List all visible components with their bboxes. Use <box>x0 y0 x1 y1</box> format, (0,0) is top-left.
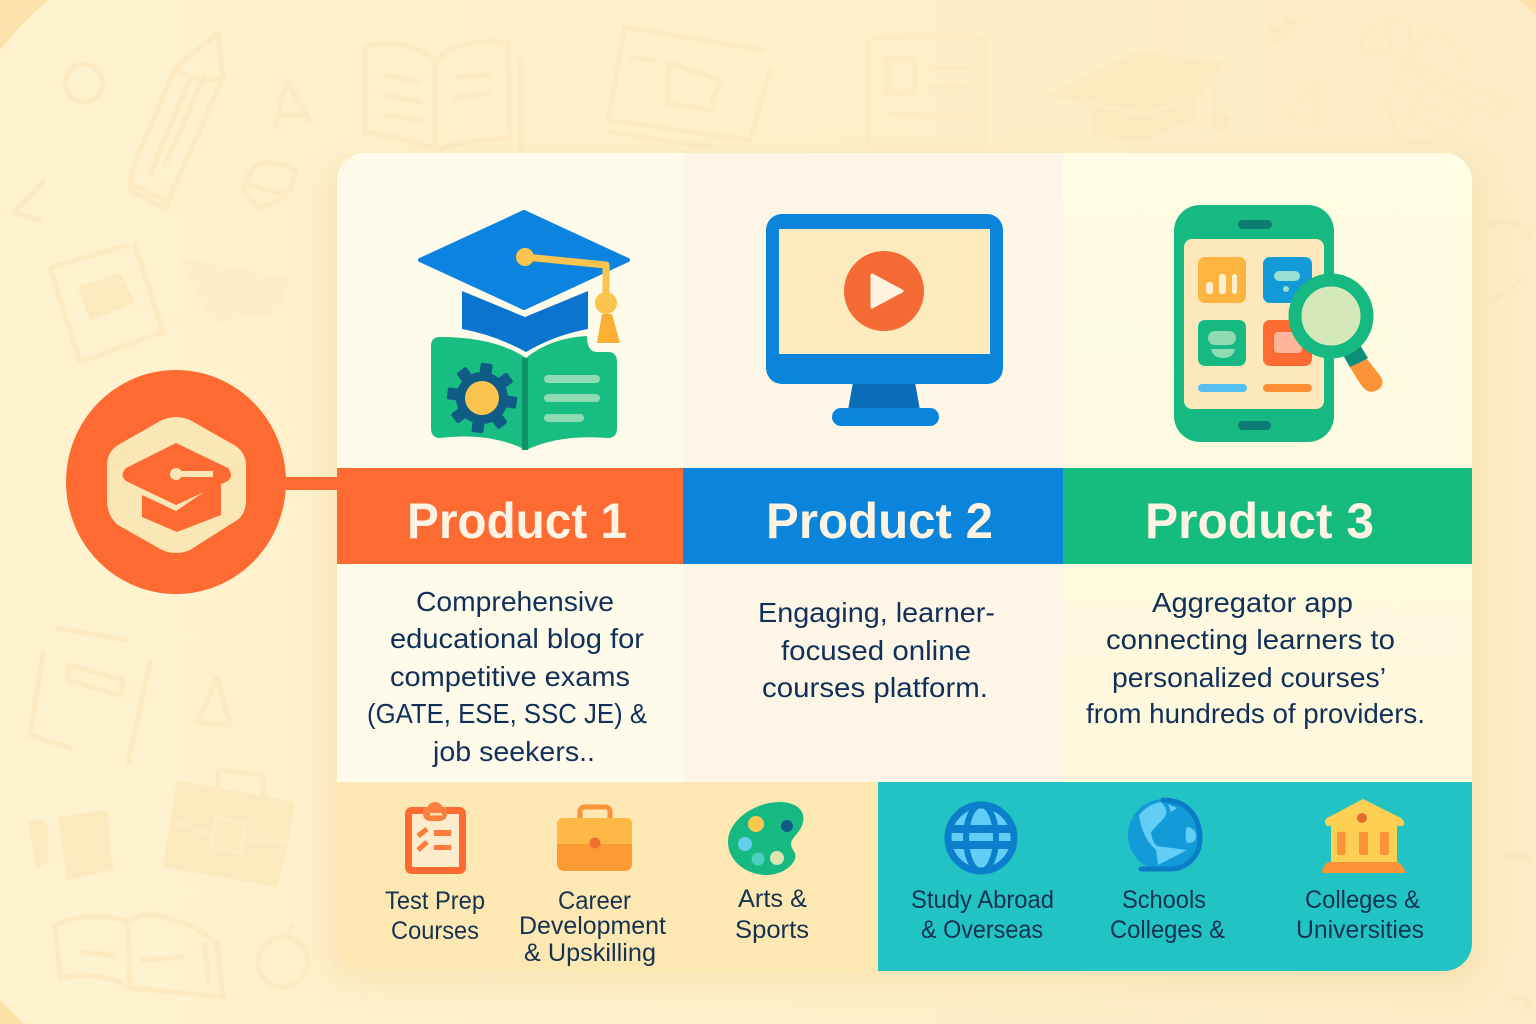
text: Product 2 description: focused online <box>781 635 971 666</box>
header: Product 2 <box>683 468 1063 564</box>
text: Product 1 description: competitive exams <box>390 661 630 692</box>
icon: video monitor <box>766 214 1003 426</box>
item: Schools Colleges & <box>1110 799 1225 944</box>
text: Product 1 description: job seekers.. <box>432 736 595 767</box>
item: Study Abroad & Overseas <box>911 805 1054 944</box>
item: Career Development & Upskilling: & Upskilling <box>524 939 656 967</box>
icon: phone with magnifier <box>1174 205 1383 442</box>
item: Arts & Sports <box>728 802 809 944</box>
text: Product 3 description: Aggregator app <box>1152 587 1353 618</box>
text: Product 3 description: connecting learners to <box>1106 624 1395 655</box>
item: Test Prep Courses <box>385 802 485 945</box>
item: Career Development & Upskilling: Development <box>519 912 666 940</box>
text: Product 2 description: courses platform. <box>762 672 988 703</box>
item: Colleges & Universities: Colleges & <box>1305 886 1420 914</box>
hub circle icon <box>66 370 286 594</box>
icon: web globe <box>948 805 1014 871</box>
header: Product 3 <box>1063 468 1472 564</box>
item: Schools Colleges &: Schools <box>1122 886 1206 914</box>
item: Study Abroad & Overseas: & Overseas <box>921 916 1043 944</box>
text: Product 1 description: educational blog for <box>390 623 644 654</box>
main panel <box>337 153 1472 971</box>
text: Product 2 description <box>758 597 995 703</box>
icon: gear <box>447 363 517 433</box>
column 1 background <box>337 153 683 783</box>
icon: briefcase <box>557 807 632 871</box>
item: Test Prep Courses: Test Prep <box>385 887 485 915</box>
item: Colleges & Universities <box>1296 799 1424 944</box>
item: Arts & Sports: Sports <box>735 916 809 944</box>
icon: graduation cap with book <box>420 212 628 450</box>
icon: earth globe <box>1128 799 1200 871</box>
text: Product 2 description: Engaging, learner- <box>758 597 995 628</box>
text: Product 1 description <box>367 586 647 767</box>
bottom right strip <box>878 782 1472 971</box>
item: Colleges & Universities: Universities <box>1296 916 1424 944</box>
header: Product 2: Product 2 <box>766 493 993 549</box>
connector line <box>280 477 340 490</box>
panel shadow <box>325 160 1480 985</box>
text: Product 1 description: (GATE, ESE, SSC JE) & <box>367 698 647 729</box>
icon: clipboard <box>408 802 462 870</box>
header: Product 1: Product 1 <box>407 493 627 549</box>
item: Career Development & Upskilling <box>519 807 666 967</box>
header: Product 1 <box>337 468 683 564</box>
item: Schools Colleges &: Colleges & <box>1110 916 1225 944</box>
item: Test Prep Courses: Courses <box>391 917 479 945</box>
text: Product 1 description: Comprehensive <box>416 586 614 617</box>
icon: palette <box>728 802 803 875</box>
text: Product 3 description: personalized courses’ <box>1112 662 1386 693</box>
bottom left strip <box>337 782 878 783</box>
header: Product 3: Product 3 <box>1145 493 1374 549</box>
item: Arts & Sports: Arts & <box>738 885 807 913</box>
item: Career Development & Upskilling: Career <box>558 887 631 915</box>
text: Product 3 description: from hundreds of providers. <box>1086 698 1425 729</box>
icon: bank building <box>1322 799 1405 873</box>
column 2 background <box>683 153 1063 783</box>
column 3 background <box>1063 153 1472 783</box>
item: Study Abroad & Overseas: Study Abroad <box>911 886 1054 914</box>
text: Product 3 description <box>1086 587 1425 729</box>
